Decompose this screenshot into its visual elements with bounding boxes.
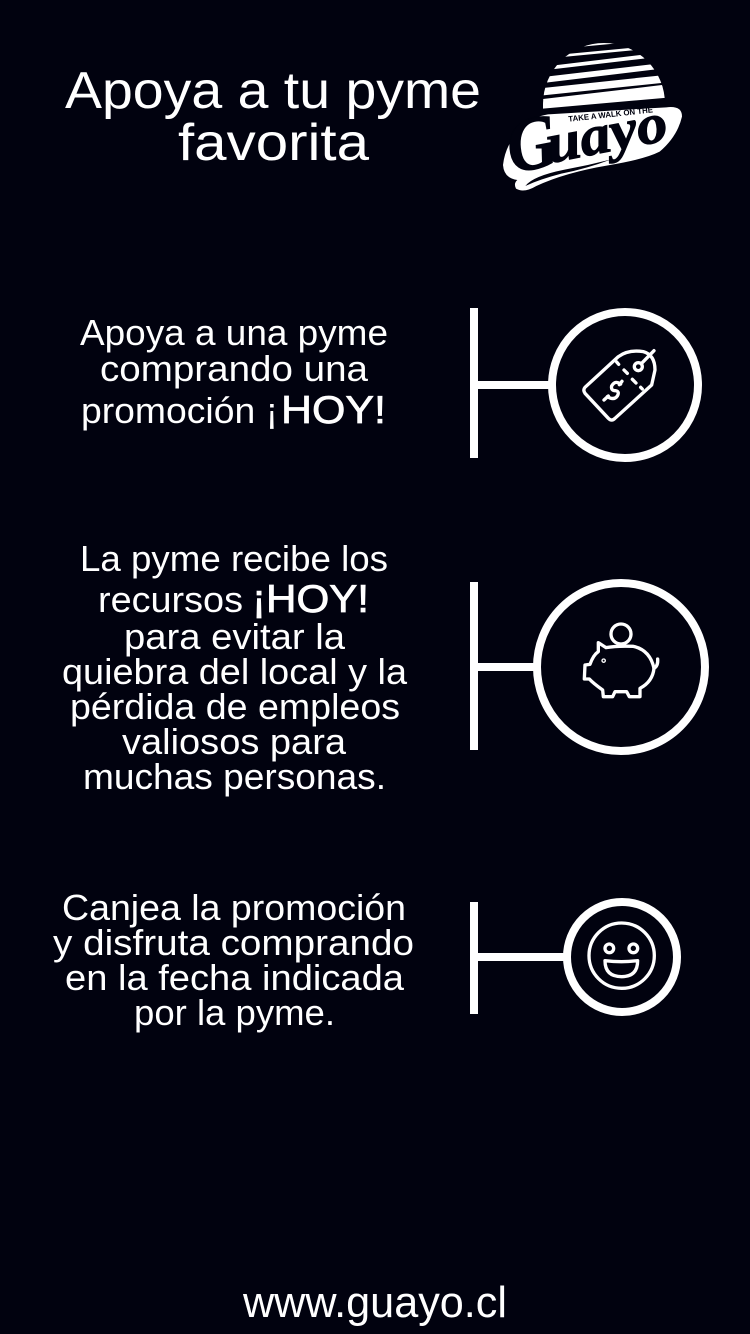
logo banner xyxy=(503,107,682,190)
text: step 2: recursos xyxy=(98,579,243,620)
text: step 2: pérdida de empleos xyxy=(70,686,400,727)
text: step 1: comprando una xyxy=(100,348,369,389)
connector 1 xyxy=(470,308,550,458)
logo wordmark: G xyxy=(499,98,564,190)
text: step 3 xyxy=(53,887,414,1033)
text: step 1: HOY! xyxy=(281,389,386,432)
text: step 2: La pyme recibe los xyxy=(80,538,388,579)
logo tagline: TAKE A WALK ON THE xyxy=(568,105,654,124)
connector 3 xyxy=(470,902,566,1014)
text: step 2: quiebra del local y la xyxy=(62,651,408,692)
circle 2 xyxy=(537,583,705,751)
text: step 3: en la fecha indicada xyxy=(65,957,405,998)
text: step 2 xyxy=(62,538,408,797)
text: step 3: y disfruta comprando xyxy=(53,922,414,963)
text: step 2: para evitar la xyxy=(124,616,346,657)
text: step 1: promoción ¡ xyxy=(81,390,278,431)
circle 3 xyxy=(567,902,677,1012)
text: step 3: Canjea la promoción xyxy=(62,887,406,928)
footer url: www.guayo.cl xyxy=(242,1278,507,1327)
text: step 2: valiosos para xyxy=(122,721,347,762)
icon: smiley xyxy=(589,923,654,988)
text: step 2: muchas personas. xyxy=(83,756,386,797)
title: favorita xyxy=(178,114,369,172)
logo wordmark xyxy=(499,92,672,190)
text: step 1 xyxy=(80,312,388,432)
logo: Guayo xyxy=(499,35,682,190)
icon: piggy bank xyxy=(584,624,658,697)
text: step 2: ¡HOY! xyxy=(252,578,369,621)
text: step 1: Apoya a una pyme xyxy=(80,312,388,353)
logo swoosh xyxy=(525,159,611,186)
logo sun with stripes xyxy=(543,43,665,109)
logo wordmark: uayo xyxy=(541,92,672,176)
icon: price tag xyxy=(584,351,655,420)
connector 2 xyxy=(470,582,536,750)
title: Apoya a tu pyme xyxy=(65,62,481,120)
title xyxy=(65,62,481,172)
text: step 3: por la pyme. xyxy=(134,992,335,1033)
circle 1 xyxy=(552,312,698,458)
